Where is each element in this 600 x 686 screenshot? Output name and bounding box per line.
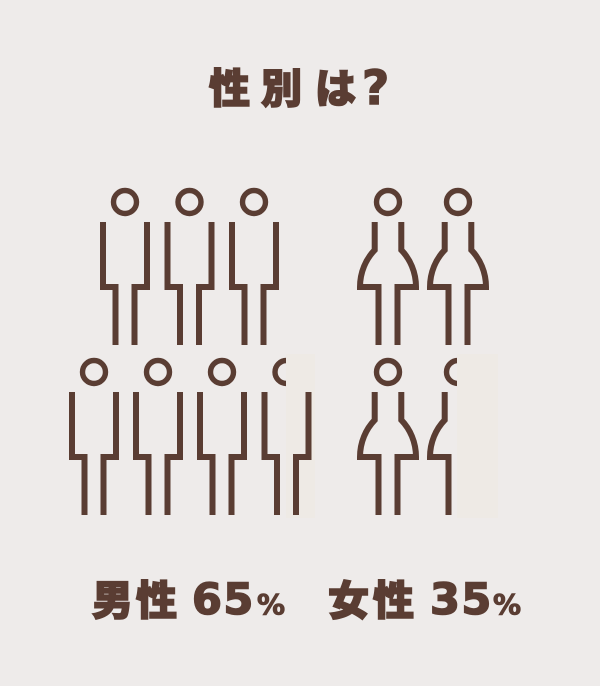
- icon: woman row 1 column 2: [430, 190, 486, 345]
- label: female 35%: %: [493, 588, 521, 621]
- label: female 35%: [328, 575, 521, 625]
- title: 別: [261, 66, 302, 112]
- icon: man row 1 column 1: [103, 190, 147, 345]
- label: male 65%: [92, 575, 285, 625]
- label: male 65%: 男: [92, 578, 133, 624]
- label: female 35%: 女: [328, 578, 369, 624]
- icon: man row 1 column 2: [168, 190, 212, 345]
- label: male 65%: %: [257, 588, 285, 621]
- label: male 65%: 性: [136, 578, 177, 624]
- icon: man row 2 column 3: [200, 360, 244, 515]
- title: 性: [209, 66, 250, 112]
- icon: woman row 2 column 1: [360, 360, 416, 515]
- icon: man row 2 column 2: [136, 360, 180, 515]
- label: male 65%: 65: [192, 575, 255, 625]
- panel: male pictogram group: [72, 190, 315, 518]
- panel: female pictogram group: [360, 190, 498, 518]
- title: [209, 61, 389, 116]
- label: female 35%: 性: [373, 578, 414, 624]
- title: ?: [362, 61, 389, 116]
- icon: man row 2 column 1: [72, 360, 116, 515]
- icon: woman row 1 column 1: [360, 190, 416, 345]
- icon: partial man (65% remainder): [264, 354, 315, 518]
- label: female 35%: 35: [430, 575, 493, 625]
- icon: man row 1 column 3: [232, 190, 276, 345]
- icon: partial woman (35% remainder): [430, 354, 498, 518]
- title: は: [315, 66, 356, 112]
